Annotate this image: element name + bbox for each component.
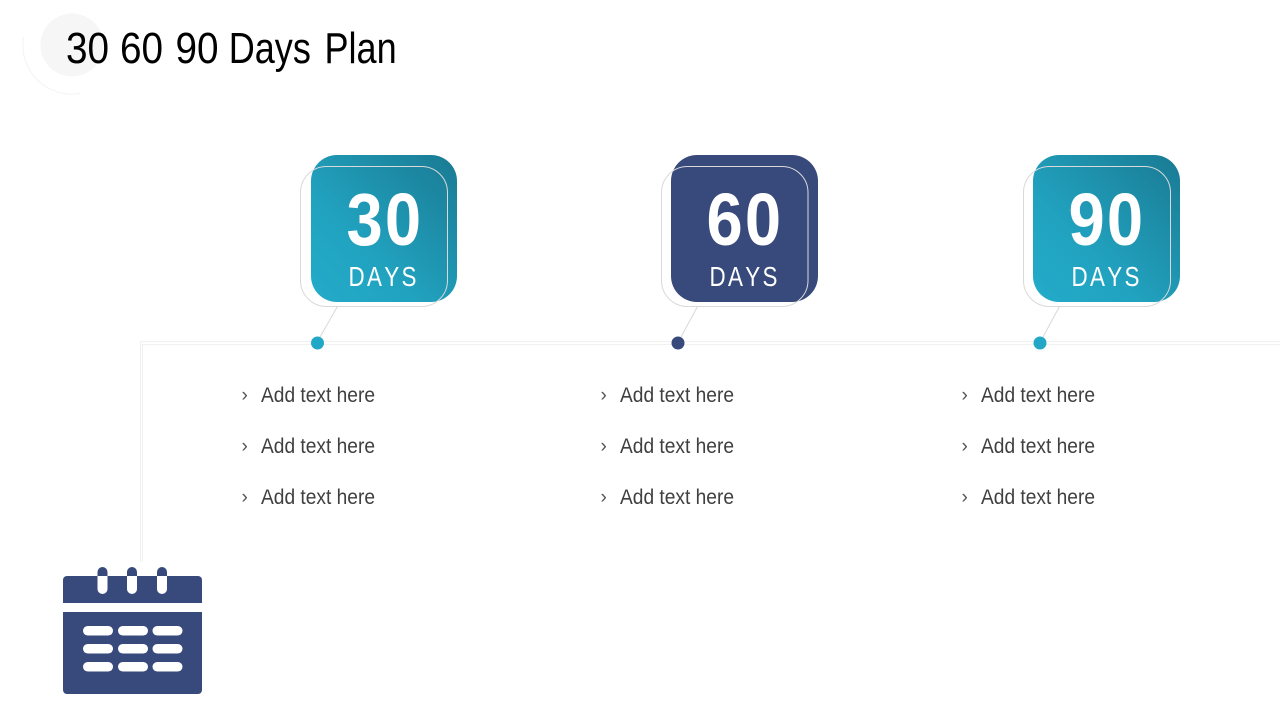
bullet list: 90 days: Add text here — [981, 486, 1095, 509]
bullet list: 60 days: Add text here — [620, 486, 734, 509]
timeline marker: 30 days — [311, 306, 338, 350]
bullet list: 60 days: Add text here — [620, 435, 734, 458]
badge: 60 days: DAYS — [710, 262, 780, 293]
timeline marker: 90 days — [1034, 306, 1060, 350]
badge: 30 days — [300, 155, 457, 306]
bullet list: 90 days: Add text here — [981, 384, 1095, 407]
bullet list: 60 days: › — [600, 436, 607, 457]
panel: 90 days — [962, 155, 1180, 509]
bullet list: 90 days: › — [962, 436, 968, 457]
badge: 90 days: 90 — [1068, 178, 1145, 261]
bullet list: 30 days: Add text here — [261, 486, 375, 509]
bullet list: 60 days: › — [600, 385, 607, 406]
title — [66, 23, 397, 73]
decorative title circle — [23, 14, 103, 94]
badge: 90 days: DAYS — [1072, 262, 1142, 293]
title: Days — [229, 24, 311, 73]
timeline connector — [140, 342, 1280, 562]
panel: 60 days — [600, 155, 818, 509]
bullet list: 30 days: › — [242, 385, 248, 406]
bullet list: 60 days — [600, 384, 734, 509]
bullet list: 90 days — [962, 384, 1095, 509]
bullet list: 30 days: › — [242, 487, 248, 508]
bullet list: 30 days: › — [242, 436, 248, 457]
badge: 60 days — [662, 155, 818, 306]
title: 90 — [175, 23, 219, 73]
badge: 90 days — [1024, 155, 1180, 306]
bullet list: 90 days: › — [962, 487, 968, 508]
panel: 30 days — [242, 155, 457, 509]
badge: 30 days: 30 — [346, 178, 423, 261]
title: 30 — [66, 23, 109, 73]
timeline marker: 60 days — [672, 306, 698, 350]
bullet list: 30 days: Add text here — [261, 435, 375, 458]
bullet list: 90 days: Add text here — [981, 435, 1095, 458]
bullet list: 90 days: › — [962, 385, 968, 406]
badge: 60 days: 60 — [706, 178, 783, 261]
bullet list: 30 days: Add text here — [261, 384, 375, 407]
bullet list: 60 days: Add text here — [620, 384, 734, 407]
title: 60 — [120, 23, 163, 73]
bullet list: 60 days: › — [600, 487, 607, 508]
bullet list: 30 days — [242, 384, 375, 509]
icon: calendar — [63, 567, 202, 694]
badge: 30 days: DAYS — [348, 262, 419, 293]
title: Plan — [324, 24, 397, 73]
